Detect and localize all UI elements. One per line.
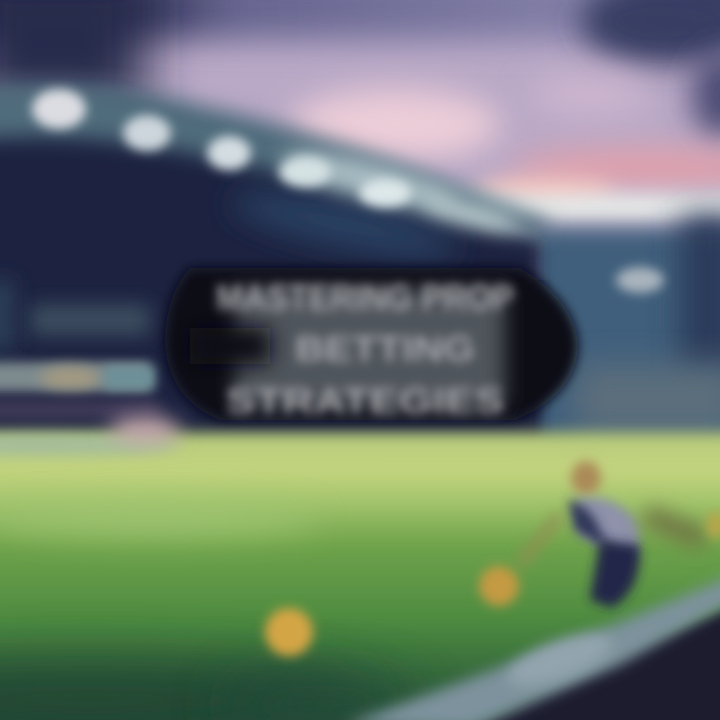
headline text: MASTERING PROP [216,277,514,318]
stadium stand and roof [0,83,550,450]
player [520,461,720,608]
stadium floodlights [32,89,411,207]
headline text [216,277,514,421]
background: distant stands on the right [530,215,720,443]
background: evening sky [0,0,720,280]
foreground barrier [345,575,720,720]
football, foreground [265,608,313,656]
football near player [479,566,519,606]
football pitch [0,417,720,720]
headline panel [165,268,578,421]
headline text: STRATEGIES [226,380,504,421]
headline text: BETTING [295,328,475,369]
